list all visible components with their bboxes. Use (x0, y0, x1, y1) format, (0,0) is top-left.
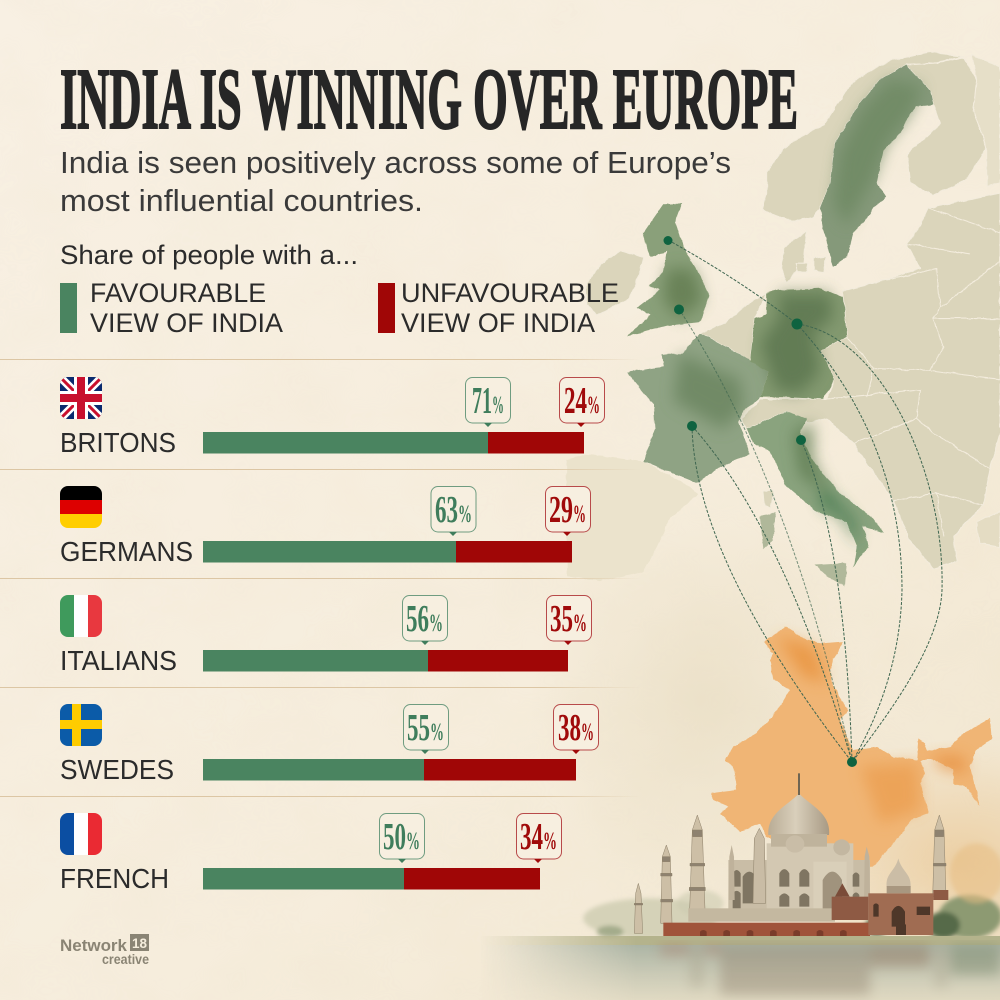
logo: Network18 creative (60, 934, 149, 967)
legend: favourable: VIEW OF INDIA (90, 308, 283, 338)
label: SWEDES (60, 754, 174, 785)
river and reflection (480, 936, 1000, 1000)
row: Britons (60, 377, 604, 458)
stacked bar (203, 541, 572, 562)
logo: Network18 creative: creative (102, 952, 149, 967)
label: FRENCH (60, 863, 169, 894)
label: ITALIANS (60, 645, 177, 676)
background trees (583, 843, 1000, 938)
red sandstone wall (663, 923, 870, 936)
subtitle: most influential countries. (60, 183, 423, 218)
legend: unfavourable: VIEW OF INDIA (401, 308, 595, 338)
callout 50%: 50 (383, 816, 406, 858)
legend: Share of people with a... (60, 240, 358, 270)
callout 38%: % (581, 719, 594, 746)
callout 50%: % (406, 828, 420, 855)
Taj Mahal illustration (583, 773, 1000, 938)
stacked bar (203, 759, 576, 780)
callout 56%: 56 (406, 598, 429, 640)
legend (60, 240, 619, 338)
stacked bar (203, 868, 540, 890)
legend: unfavourable (378, 278, 619, 338)
red sandstone pavilion (832, 858, 948, 935)
legend: favourable: FAVOURABLE (90, 278, 266, 308)
legend: unfavourable: UNFAVOURABLE (401, 278, 619, 308)
callout 63%: 63 (435, 489, 458, 531)
row: Italians (60, 595, 592, 676)
stacked bar (203, 432, 584, 454)
icon: UK flag (60, 377, 102, 419)
callout 56%: % (429, 610, 443, 637)
logo: Network18 creative: 18 (132, 935, 147, 951)
callout 29%: 29 (549, 489, 573, 531)
logo: Network18 creative: Network (60, 937, 128, 955)
callout 55%: 55 (407, 707, 430, 749)
label: GERMANS (60, 536, 193, 567)
Britain (627, 204, 709, 336)
row: Swedes (60, 704, 598, 785)
callout 35%: 35 (550, 598, 573, 640)
highlighted countries (627, 65, 933, 586)
map of Europe (567, 52, 1000, 586)
callout 71%: % (492, 392, 504, 419)
stacked bar (203, 650, 568, 672)
icon: Italian flag (60, 595, 102, 637)
Sweden (820, 65, 933, 267)
callout 24%: % (587, 392, 600, 419)
dashed arcs from Europe to India (668, 240, 942, 762)
minarets (634, 815, 946, 933)
Italy (747, 411, 883, 567)
callout 34%: % (543, 828, 557, 855)
France (627, 333, 768, 483)
map of India (710, 627, 992, 870)
label: BRITONS (60, 427, 176, 458)
subtitle (60, 145, 731, 218)
subtitle: India is seen positively across some of Europe’s (60, 145, 731, 180)
Germany (750, 288, 847, 399)
callout 71%: 71 (472, 380, 492, 422)
icon: French flag (60, 813, 102, 855)
row: Germans (60, 486, 590, 567)
Sicily and Sardinia (760, 511, 847, 586)
location dots (664, 236, 857, 767)
callout 34%: 34 (520, 816, 543, 858)
callout 29%: % (573, 501, 586, 528)
row: French (60, 813, 562, 894)
callout 38%: 38 (558, 707, 581, 749)
icon: Swedish flag (60, 704, 102, 746)
icon: German flag (60, 486, 102, 528)
callout 55%: % (430, 719, 444, 746)
main mausoleum (688, 773, 870, 922)
darker tones (663, 79, 923, 547)
callout 24%: 24 (564, 380, 587, 422)
callout 63%: % (458, 501, 472, 528)
legend: favourable (60, 278, 283, 338)
non-highlighted countries (567, 52, 1000, 581)
callout 35%: % (573, 610, 587, 637)
